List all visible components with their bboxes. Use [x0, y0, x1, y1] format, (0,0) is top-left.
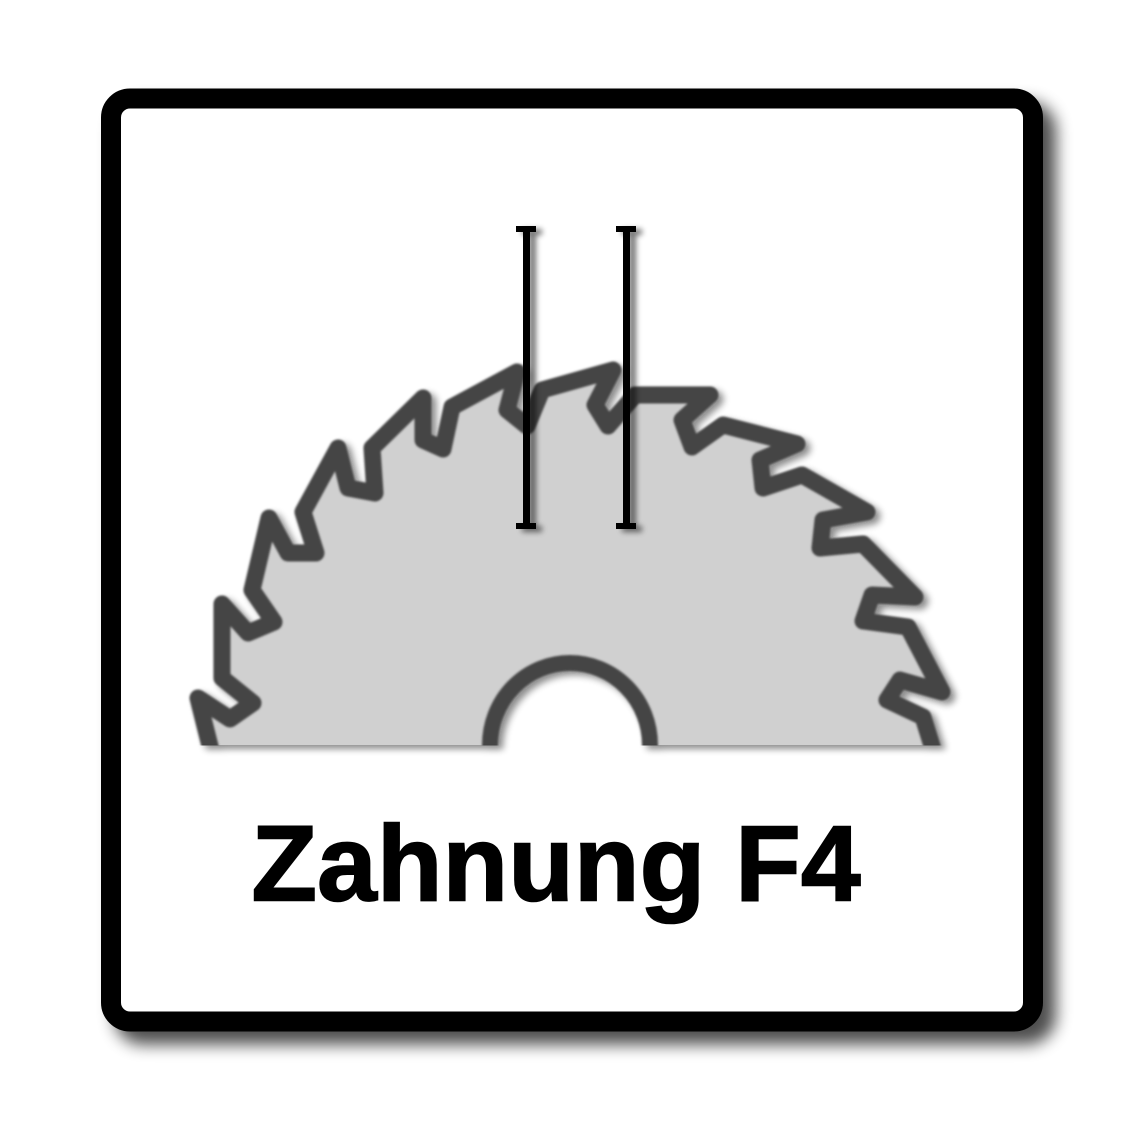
tooth pitch marker right — [616, 226, 636, 529]
tooth pitch marker left — [516, 226, 536, 529]
blade body with teeth — [198, 370, 942, 745]
saw blade — [198, 370, 942, 762]
heading: Zahnung F4: Zahnung F4 — [251, 802, 861, 924]
infographic: saw blade tooth sign — [101, 88, 1068, 1057]
blade tooth outline — [198, 370, 942, 762]
sign frame — [111, 98, 1033, 1022]
arbor hole arc — [490, 663, 650, 762]
